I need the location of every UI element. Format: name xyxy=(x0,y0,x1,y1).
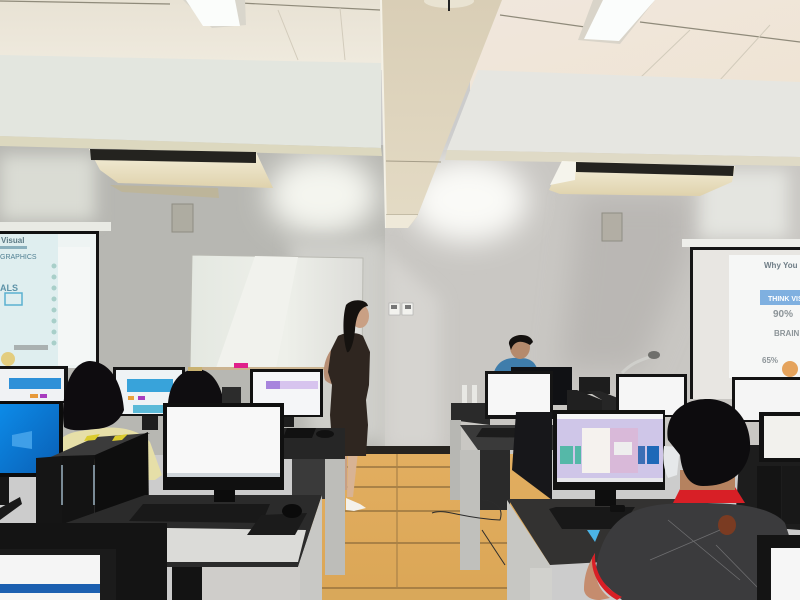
teacher face xyxy=(351,304,369,328)
left projection screen xyxy=(0,222,111,368)
wall light patches xyxy=(0,155,788,450)
right projection screen xyxy=(682,239,800,399)
monitor: instructor front xyxy=(485,371,553,419)
wall beam left xyxy=(0,55,382,156)
teacher dress xyxy=(328,333,370,456)
cables on floor xyxy=(432,500,505,565)
wall below beams xyxy=(0,145,800,455)
wall thermostat panels xyxy=(389,303,413,315)
back row desk xyxy=(250,428,345,575)
monitor: front canva screen xyxy=(553,410,665,506)
student shirt xyxy=(595,503,792,600)
floor tiles xyxy=(310,454,550,600)
mouse pad and mouse xyxy=(247,504,307,535)
lamp microphone xyxy=(622,351,660,373)
student seated front xyxy=(584,399,792,600)
student neck and mask xyxy=(680,470,735,490)
monitor: foreground bottom right xyxy=(757,535,800,600)
skirting board xyxy=(340,446,460,454)
screen heading text: Visual xyxy=(1,236,24,245)
left projection screen: GRAPHICS xyxy=(0,254,37,261)
student forearm xyxy=(584,553,610,600)
student seated left xyxy=(60,361,162,480)
student logo badge xyxy=(718,515,736,535)
monitor: right edge xyxy=(759,412,800,462)
screen poster heading: Why You xyxy=(764,261,798,270)
ceiling projector mount xyxy=(424,0,474,11)
instructor monitor rear xyxy=(511,367,572,405)
teacher standing xyxy=(324,300,370,511)
front desk left xyxy=(60,495,322,600)
teacher hair xyxy=(343,300,368,352)
chair back foreground xyxy=(0,523,167,600)
server towers center xyxy=(567,377,623,410)
ceiling light right xyxy=(578,0,655,44)
screen camera icon xyxy=(5,293,22,305)
monitor: main white screen xyxy=(163,403,284,502)
student hair xyxy=(667,399,750,486)
chair rear center xyxy=(512,412,552,500)
screen poster second percentage: 65% xyxy=(762,356,778,365)
blue notebook xyxy=(587,530,600,542)
monitor: windows desktop xyxy=(0,401,63,520)
front desk right xyxy=(507,499,700,600)
left projection screen: ALS xyxy=(0,283,18,293)
air conditioner left xyxy=(89,149,273,198)
air conditioner right xyxy=(549,161,735,196)
teacher shoes xyxy=(346,498,366,511)
keyboard main xyxy=(129,504,270,523)
teacher arm xyxy=(324,350,337,384)
wall beam right xyxy=(445,70,800,166)
monitor: back row right one xyxy=(616,374,687,417)
student seated center xyxy=(168,367,241,405)
back row right desks xyxy=(450,385,560,570)
ceiling light left xyxy=(183,0,246,28)
ceiling xyxy=(0,0,800,90)
monitor: back row second xyxy=(113,367,185,430)
monitor: back row right two xyxy=(732,377,800,422)
pc towers left xyxy=(36,432,150,529)
wall speaker right xyxy=(602,213,622,241)
monitor: foreground bottom left xyxy=(0,549,116,600)
whiteboard xyxy=(190,255,363,370)
keyboard instructor xyxy=(476,428,550,438)
keyboard front xyxy=(549,507,635,529)
monitor: back row far left xyxy=(0,366,68,403)
right side desk and towers xyxy=(735,445,800,530)
teacher legs xyxy=(347,452,358,497)
screen poster brain label: BRAIN xyxy=(774,329,800,338)
wall speaker left xyxy=(172,204,193,232)
monitor: back row third xyxy=(250,369,334,438)
instructor seated xyxy=(494,335,538,372)
screen poster percentage: 90% xyxy=(773,309,793,320)
central column xyxy=(381,0,502,228)
student collar xyxy=(673,487,745,503)
student sleeve stripe xyxy=(592,553,622,600)
